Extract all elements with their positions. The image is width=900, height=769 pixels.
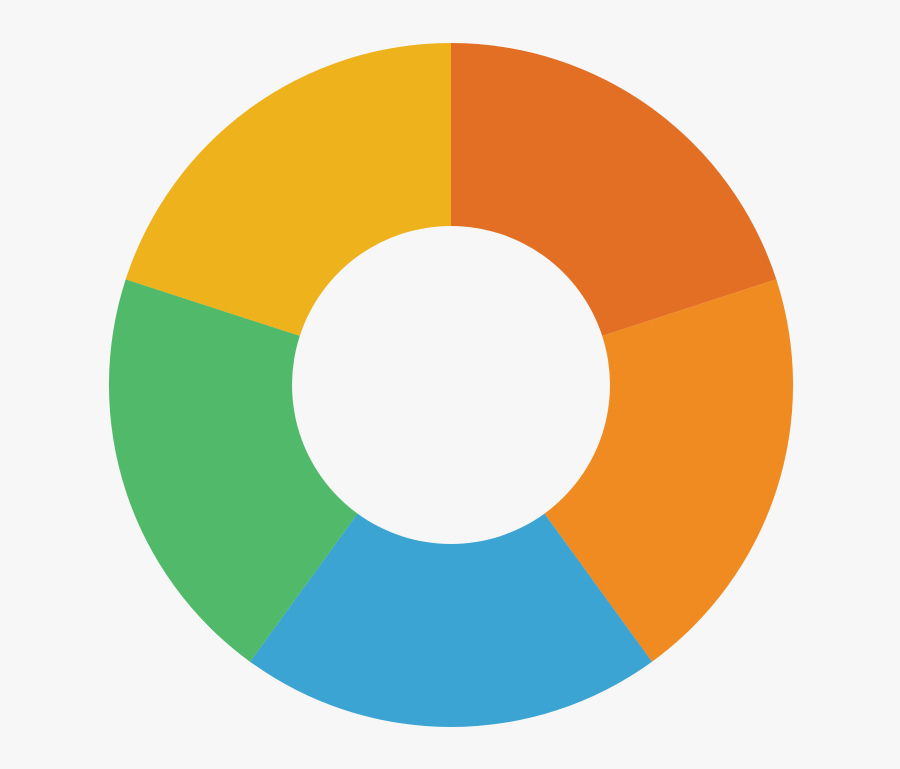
segment: red-orange [451,43,776,336]
segment: blue [250,514,652,727]
segment: yellow [126,43,451,336]
segment: green [109,279,358,662]
segment: orange [544,279,793,662]
